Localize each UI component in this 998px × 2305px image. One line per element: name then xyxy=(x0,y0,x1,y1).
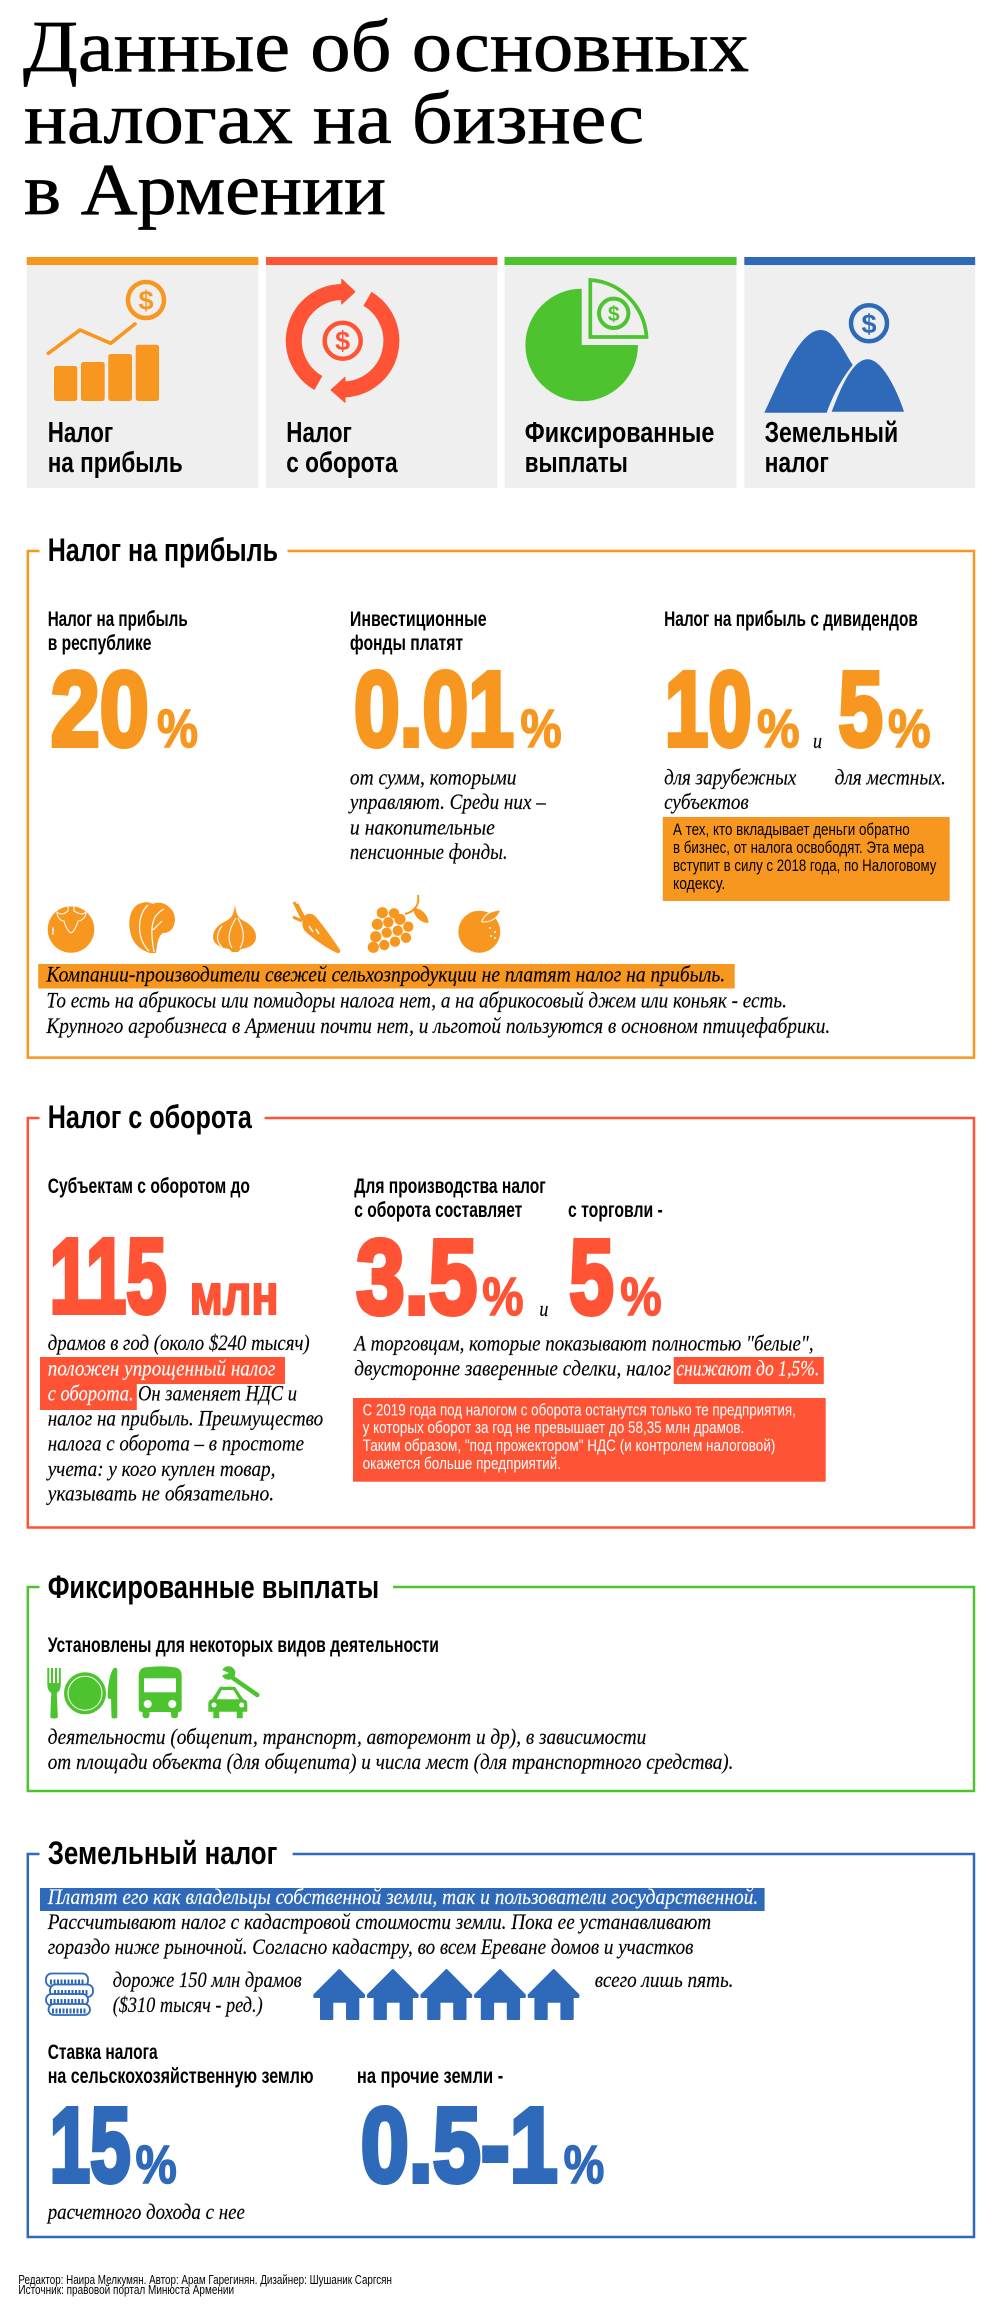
stat: 0.01%: фонды платят xyxy=(350,632,463,655)
stat: 0.5-1%: на прочие земли - xyxy=(357,2065,503,2088)
stat: 0.01%: и накопительные xyxy=(350,814,495,840)
stat: 0.01%: 0.01 xyxy=(354,650,514,768)
panel heading: Фиксированные выплаты xyxy=(48,1569,379,1605)
icon: pie chart with dollar xyxy=(525,280,646,401)
text: simplified tax: учета: у кого куплен товар, xyxy=(46,1456,275,1481)
stat: 20%: в республике xyxy=(48,632,151,655)
stat: 3.5% and 5%: с торговли - xyxy=(568,1199,663,1222)
stat: 0.01%: пенсионные фонды. xyxy=(350,839,508,864)
stat: dividends 10% and 5%: для зарубежных xyxy=(664,764,796,790)
icon: lettuce xyxy=(129,902,175,953)
card: fixed payments xyxy=(504,257,737,488)
footer credits: Редактор: Наира Мелкумян. Автор: Арам Гарегинян. Дизайнер: Шушаник Саргсян xyxy=(18,2272,392,2287)
callout: 2018 reinvestment: кодексу. xyxy=(673,874,725,893)
text: over 150 million: ($310 тысяч - ред.) xyxy=(113,1992,263,2017)
callout: 2019 change: Таким образом, "под прожектором" НДС (и контролем налоговой) xyxy=(363,1436,775,1455)
stat: 0.01% xyxy=(348,608,562,864)
stat: 20% xyxy=(48,608,198,768)
stat: 3.5% and 5%: % xyxy=(482,1267,524,1327)
text: only five: всего лишь пять. xyxy=(595,1967,734,1992)
stat: dividends 10% and 5% xyxy=(664,608,946,814)
icon: pie chart with dollar: $ xyxy=(608,303,620,326)
card label xyxy=(765,417,898,479)
icon: bus xyxy=(139,1666,182,1718)
text: fixed payments explanation: деятельности (общепит, транспорт, авторемонт и др), в зависимости xyxy=(48,1724,646,1749)
card label: Налог xyxy=(48,417,113,449)
icon: circular arrows with dollar xyxy=(294,279,391,402)
stat: 3.5% and 5% xyxy=(354,1175,663,1336)
text: simplified tax: указывать не обязательно. xyxy=(46,1481,274,1506)
text: traders discount: двусторонне заверенные сделки, налог xyxy=(354,1356,671,1381)
icon: rising chart with dollar xyxy=(48,282,164,401)
stat: dividends 10% and 5%: субъектов xyxy=(664,789,749,814)
stat: dividends 10% and 5%: % xyxy=(888,699,931,759)
stat: 0.01%: Инвестиционные xyxy=(350,608,487,631)
callout: 2018 reinvestment xyxy=(663,817,950,901)
panel heading: Налог с оборота xyxy=(48,1099,252,1135)
card label: на прибыль xyxy=(48,447,183,479)
card label: Налог xyxy=(286,417,352,449)
stat: 3.5% and 5%: Для производства налог xyxy=(354,1175,546,1198)
icon: grapes xyxy=(368,895,428,953)
card label: Земельный xyxy=(765,417,898,449)
callout: 2019 change: окажется больше предприятий. xyxy=(363,1454,561,1473)
text: farm exemption explanation: Крупного агробизнеса в Армении почти нет, и льготой пользуются в основном птицефабрики. xyxy=(46,1013,830,1038)
stat: 3.5% and 5%: 5 xyxy=(569,1218,614,1336)
icon: five houses xyxy=(314,1970,578,2019)
text: over 150 million xyxy=(113,1967,302,2017)
stat: 3.5% and 5%: и xyxy=(539,1296,548,1321)
text: traders discount: А торговцам, которые показывают полностью "белые", xyxy=(353,1331,814,1356)
footer credits xyxy=(18,2272,392,2297)
icon: carrot xyxy=(293,902,340,953)
text: fixed payments explanation: от площади объекта (для общепита) и числа мест (для транспортного средства). xyxy=(48,1749,733,1774)
icon: orange xyxy=(458,910,501,953)
text: simplified tax: драмов в год (около $240 тысяч) xyxy=(48,1330,310,1355)
stat: 3.5% and 5%: с оборота составляет xyxy=(354,1199,522,1222)
stat: 15%: 15 xyxy=(50,2086,131,2204)
text: simplified tax: с оборота. xyxy=(48,1381,134,1406)
stat: 15%: расчетного дохода с нее xyxy=(46,2199,245,2224)
card label xyxy=(286,417,398,479)
stat: dividends 10% and 5%: 5 xyxy=(838,650,883,768)
stat: 15%: Ставка налога xyxy=(48,2041,158,2064)
stat: 3.5% and 5%: 3.5 xyxy=(356,1218,477,1336)
highlight: who pays: Платят его как владельцы собственной земли, так и пользователи государственной. xyxy=(47,1884,758,1909)
card: turnover tax xyxy=(266,257,497,488)
footer credits: Источник: правовой портал Минюста Армении xyxy=(18,2282,234,2297)
title: Данные об основных xyxy=(23,6,749,87)
text: simplified tax: положен упрощенный налог xyxy=(48,1356,276,1381)
icon: rising chart with dollar: $ xyxy=(138,286,154,316)
card label: выплаты xyxy=(525,447,628,479)
panel: land tax xyxy=(28,1835,974,2237)
text: traders discount: снижают до 1,5%. xyxy=(676,1356,819,1381)
stat: 15%: на сельскохозяйственную землю xyxy=(48,2065,314,2088)
stat: 20%: Налог на прибыль xyxy=(48,608,188,631)
card label xyxy=(525,417,714,479)
callout: 2019 change: С 2019 года под налогом с оборота останутся только те предприятия, xyxy=(363,1401,796,1420)
icon: circular arrows with dollar: $ xyxy=(335,326,350,356)
card: land tax xyxy=(744,257,975,488)
text: farm exemption explanation: То есть на абрикосы или помидоры налога нет, а на абрикосовый джем или коньяк - есть. xyxy=(46,988,787,1013)
text: cadastral value: гораздо ниже рыночной. Согласно кадастру, во всем Ереване домов и участков xyxy=(48,1934,694,1959)
stat: 115 million xyxy=(48,1175,279,1336)
callout: 2018 reinvestment: в бизнес, от налога освободят. Эта мера xyxy=(673,838,925,857)
text: cadastral value: Рассчитывают налог с кадастровой стоимости земли. Пока ее устанавливают xyxy=(47,1909,711,1934)
subheading: Установлены для некоторых видов деятельности xyxy=(48,1634,439,1657)
title: в Армении xyxy=(24,149,386,230)
callout: 2019 change: у которых оборот за год не превышает до 58,35 млн драмов. xyxy=(363,1418,744,1437)
text: simplified tax: налог на прибыль. Преимущество xyxy=(48,1406,323,1431)
stat: 15%: % xyxy=(136,2135,177,2195)
card label: с оборота xyxy=(286,447,398,479)
text: over 150 million: дороже 150 млн драмов xyxy=(113,1967,302,1992)
panel: fixed payments xyxy=(28,1569,974,1791)
text: farm exemption explanation xyxy=(46,988,830,1038)
text: traders discount xyxy=(353,1331,824,1384)
stat: 0.5-1%: % xyxy=(564,2135,604,2195)
icon: mountains with dollar: $ xyxy=(861,309,877,339)
stat: 15% xyxy=(46,2041,314,2224)
stat: dividends 10% and 5%: % xyxy=(757,699,800,759)
card label: Фиксированные xyxy=(525,417,714,449)
panel heading: Земельный налог xyxy=(48,1835,277,1871)
stat: 115 million: Субъектам с оборотом до xyxy=(48,1175,250,1198)
stat: 0.5-1%: 0.5-1 xyxy=(361,2086,558,2204)
text: fixed payments explanation xyxy=(48,1724,733,1774)
stat: 115 million: млн xyxy=(190,1263,279,1327)
stat: dividends 10% and 5%: для местных. xyxy=(835,764,946,790)
stat: 3.5% and 5%: % xyxy=(620,1267,662,1327)
text: simplified tax: налога с оборота – в простоте xyxy=(48,1431,304,1456)
panel: profit tax xyxy=(28,532,974,1058)
card label: налог xyxy=(765,447,829,479)
panel: turnover tax xyxy=(28,1099,974,1528)
text: cadastral value xyxy=(47,1909,711,1959)
callout: 2018 reinvestment: А тех, кто вкладывает деньги обратно xyxy=(673,820,910,839)
panel heading: Налог на прибыль xyxy=(48,532,278,568)
text: simplified tax: Он заменяет НДС и xyxy=(138,1381,297,1406)
icon: garlic xyxy=(213,904,256,952)
highlight: farm exemption: Компании-производители свежей сельхозпродукции не платят налог на прибыль. xyxy=(46,962,725,987)
card: profit tax xyxy=(27,257,258,488)
stat: 0.01%: от сумм, которыми xyxy=(350,764,516,790)
stat: 0.01%: управляют. Среди них – xyxy=(348,789,546,814)
card label xyxy=(48,417,183,479)
icon: car and wrench xyxy=(208,1666,257,1718)
text: simplified tax xyxy=(40,1330,323,1506)
stat: 115 million: 115 xyxy=(50,1218,167,1336)
icon: mountains with dollar xyxy=(764,305,904,413)
icon: coins xyxy=(46,1974,93,2015)
stat: 20%: % xyxy=(157,699,198,759)
callout: 2019 change xyxy=(353,1398,826,1482)
icon: fork plate knife xyxy=(47,1668,117,1718)
stat: dividends 10% and 5%: 10 xyxy=(665,650,752,768)
stat: 0.01%: % xyxy=(520,699,562,759)
title: налогах на бизнес xyxy=(24,78,644,159)
stat: dividends 10% and 5%: и xyxy=(813,728,822,753)
icon: tomato xyxy=(48,906,94,953)
stat: 20%: 20 xyxy=(51,650,149,768)
title xyxy=(23,6,749,230)
